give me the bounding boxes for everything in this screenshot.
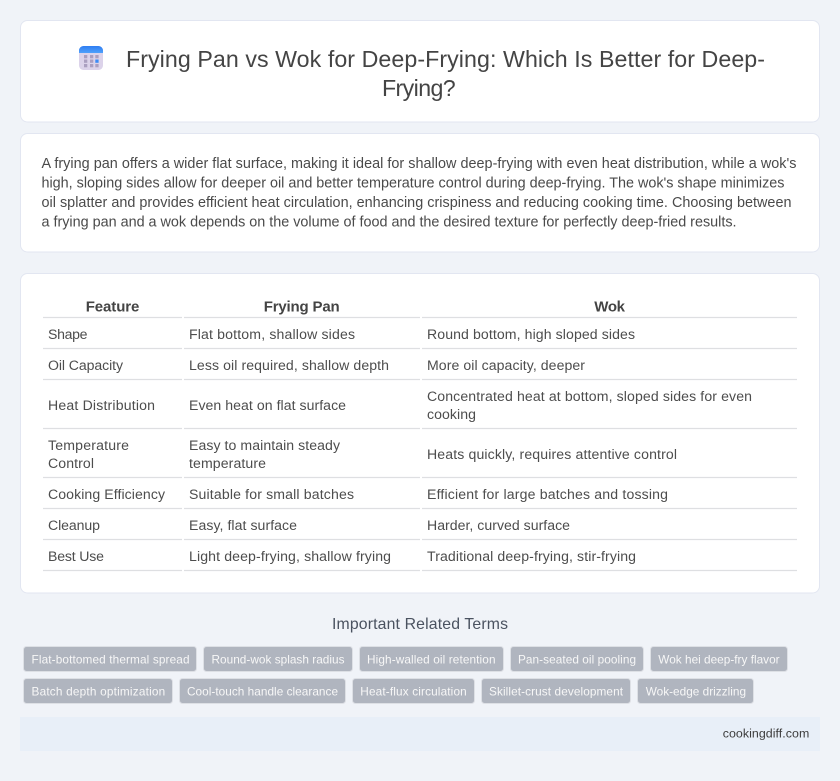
tag: pan-seated oil pooling: [510, 646, 644, 672]
heading: important related terms: Important Related Terms: [332, 616, 508, 633]
row: heat distribution: [48, 388, 752, 422]
related term tags: [24, 646, 788, 704]
row: cooking efficiency: Efficient for large batches and tossing: [427, 486, 668, 502]
row: temperature control: Control: [48, 455, 94, 471]
table header row: [86, 298, 626, 316]
panel: header: [20, 20, 820, 122]
row: shape: Round bottom, high sloped sides: [427, 326, 635, 342]
tag: high-walled oil retention: High-walled oil retention: [367, 652, 496, 666]
row: temperature control: [48, 437, 677, 471]
text block: introduction paragraph: [42, 156, 796, 230]
text block: introduction paragraph: oil splatter and provides efficient heat circulation, enhancing crispiness and reducing cooking time. Choosing between: [42, 195, 792, 211]
table header row: Frying Pan: [264, 298, 340, 316]
row: shape: Flat bottom, shallow sides: [189, 326, 355, 342]
tag: flat-bottomed thermal spread: [24, 646, 196, 672]
row: oil capacity: Less oil required, shallow depth: [189, 357, 389, 373]
row: temperature control: Temperature: [48, 437, 129, 453]
row: best use: Best Use: [48, 548, 104, 564]
tag: round-wok splash radius: Round-wok splash radius: [212, 652, 345, 666]
panel: comparison table: [20, 274, 820, 593]
row: heat distribution: Even heat on flat surface: [189, 397, 346, 413]
row: shape: Shape: [48, 326, 88, 342]
tag: batch depth optimization: [24, 678, 172, 704]
table header row: Wok: [594, 298, 626, 316]
tag: skillet-crust development: Skillet-crust development: [489, 684, 624, 698]
footer source text: cookingdiff.com: [723, 727, 809, 741]
row: cooking efficiency: Suitable for small batches: [189, 486, 354, 502]
text block: introduction paragraph: high, sloping sides allow for deeper oil and better temperature control during deep-frying. The wok's shape minimizes: [42, 176, 784, 192]
tag: wok hei deep-fry flavor: [650, 646, 788, 672]
panel: introduction: [20, 134, 820, 252]
tag: heat-flux circulation: [352, 678, 474, 704]
row: cleanup: Easy, flat surface: [189, 517, 297, 533]
text block: introduction paragraph: A frying pan offers a wider flat surface, making it ideal for shallow deep-frying with even heat distribution, while a wok's: [42, 156, 796, 172]
text block: introduction paragraph: a frying pan and a wok depends on the volume of food and the desired texture for perfectly deep-fried results.: [42, 214, 736, 230]
row: cleanup: Cleanup: [48, 517, 100, 533]
tag: round-wok splash radius: [204, 646, 352, 672]
row: temperature control: Easy to maintain steady: [189, 437, 341, 453]
row: heat distribution: Heat Distribution: [48, 397, 155, 413]
row: cleanup: Harder, curved surface: [427, 517, 570, 533]
tag: pan-seated oil pooling: Pan-seated oil pooling: [518, 652, 636, 666]
table header row: Feature: [86, 298, 139, 316]
row: best use: [48, 548, 636, 564]
tag: high-walled oil retention: [360, 646, 504, 672]
tag: heat-flux circulation: Heat-flux circulation: [360, 684, 467, 698]
row: shape: [48, 326, 635, 342]
tag: batch depth optimization: Batch depth optimization: [32, 684, 165, 698]
title: Frying?: [382, 75, 456, 101]
row: temperature control: temperature: [189, 455, 266, 471]
row: cooking efficiency: [48, 486, 668, 502]
row: heat distribution: Concentrated heat at bottom, sloped sides for even: [427, 388, 752, 404]
row: temperature control: Heats quickly, requires attentive control: [427, 446, 677, 462]
title: Frying Pan vs Wok for Deep-Frying: Which Is Better for Deep-: [126, 46, 765, 72]
footer: [20, 717, 820, 751]
row: heat distribution: cooking: [427, 406, 476, 422]
tag: wok-edge drizzling: [638, 678, 754, 704]
icon: calendar: [79, 46, 103, 70]
tag: skillet-crust development: [482, 678, 630, 704]
row: best use: Traditional deep-frying, stir-frying: [427, 548, 636, 564]
tag: cool-touch handle clearance: [180, 678, 346, 704]
tag: flat-bottomed thermal spread: Flat-bottomed thermal spread: [32, 652, 190, 666]
row: cleanup: [48, 517, 570, 533]
row: oil capacity: Oil Capacity: [48, 357, 124, 373]
row: best use: Light deep-frying, shallow frying: [189, 548, 391, 564]
row: oil capacity: More oil capacity, deeper: [427, 357, 585, 373]
row: oil capacity: [48, 357, 585, 373]
tag: cool-touch handle clearance: Cool-touch handle clearance: [187, 684, 338, 698]
tag: wok hei deep-fry flavor: Wok hei deep-fry flavor: [658, 652, 780, 666]
title: [126, 46, 765, 101]
row: cooking efficiency: Cooking Efficiency: [48, 486, 166, 502]
tag: wok-edge drizzling: Wok-edge drizzling: [646, 684, 746, 698]
